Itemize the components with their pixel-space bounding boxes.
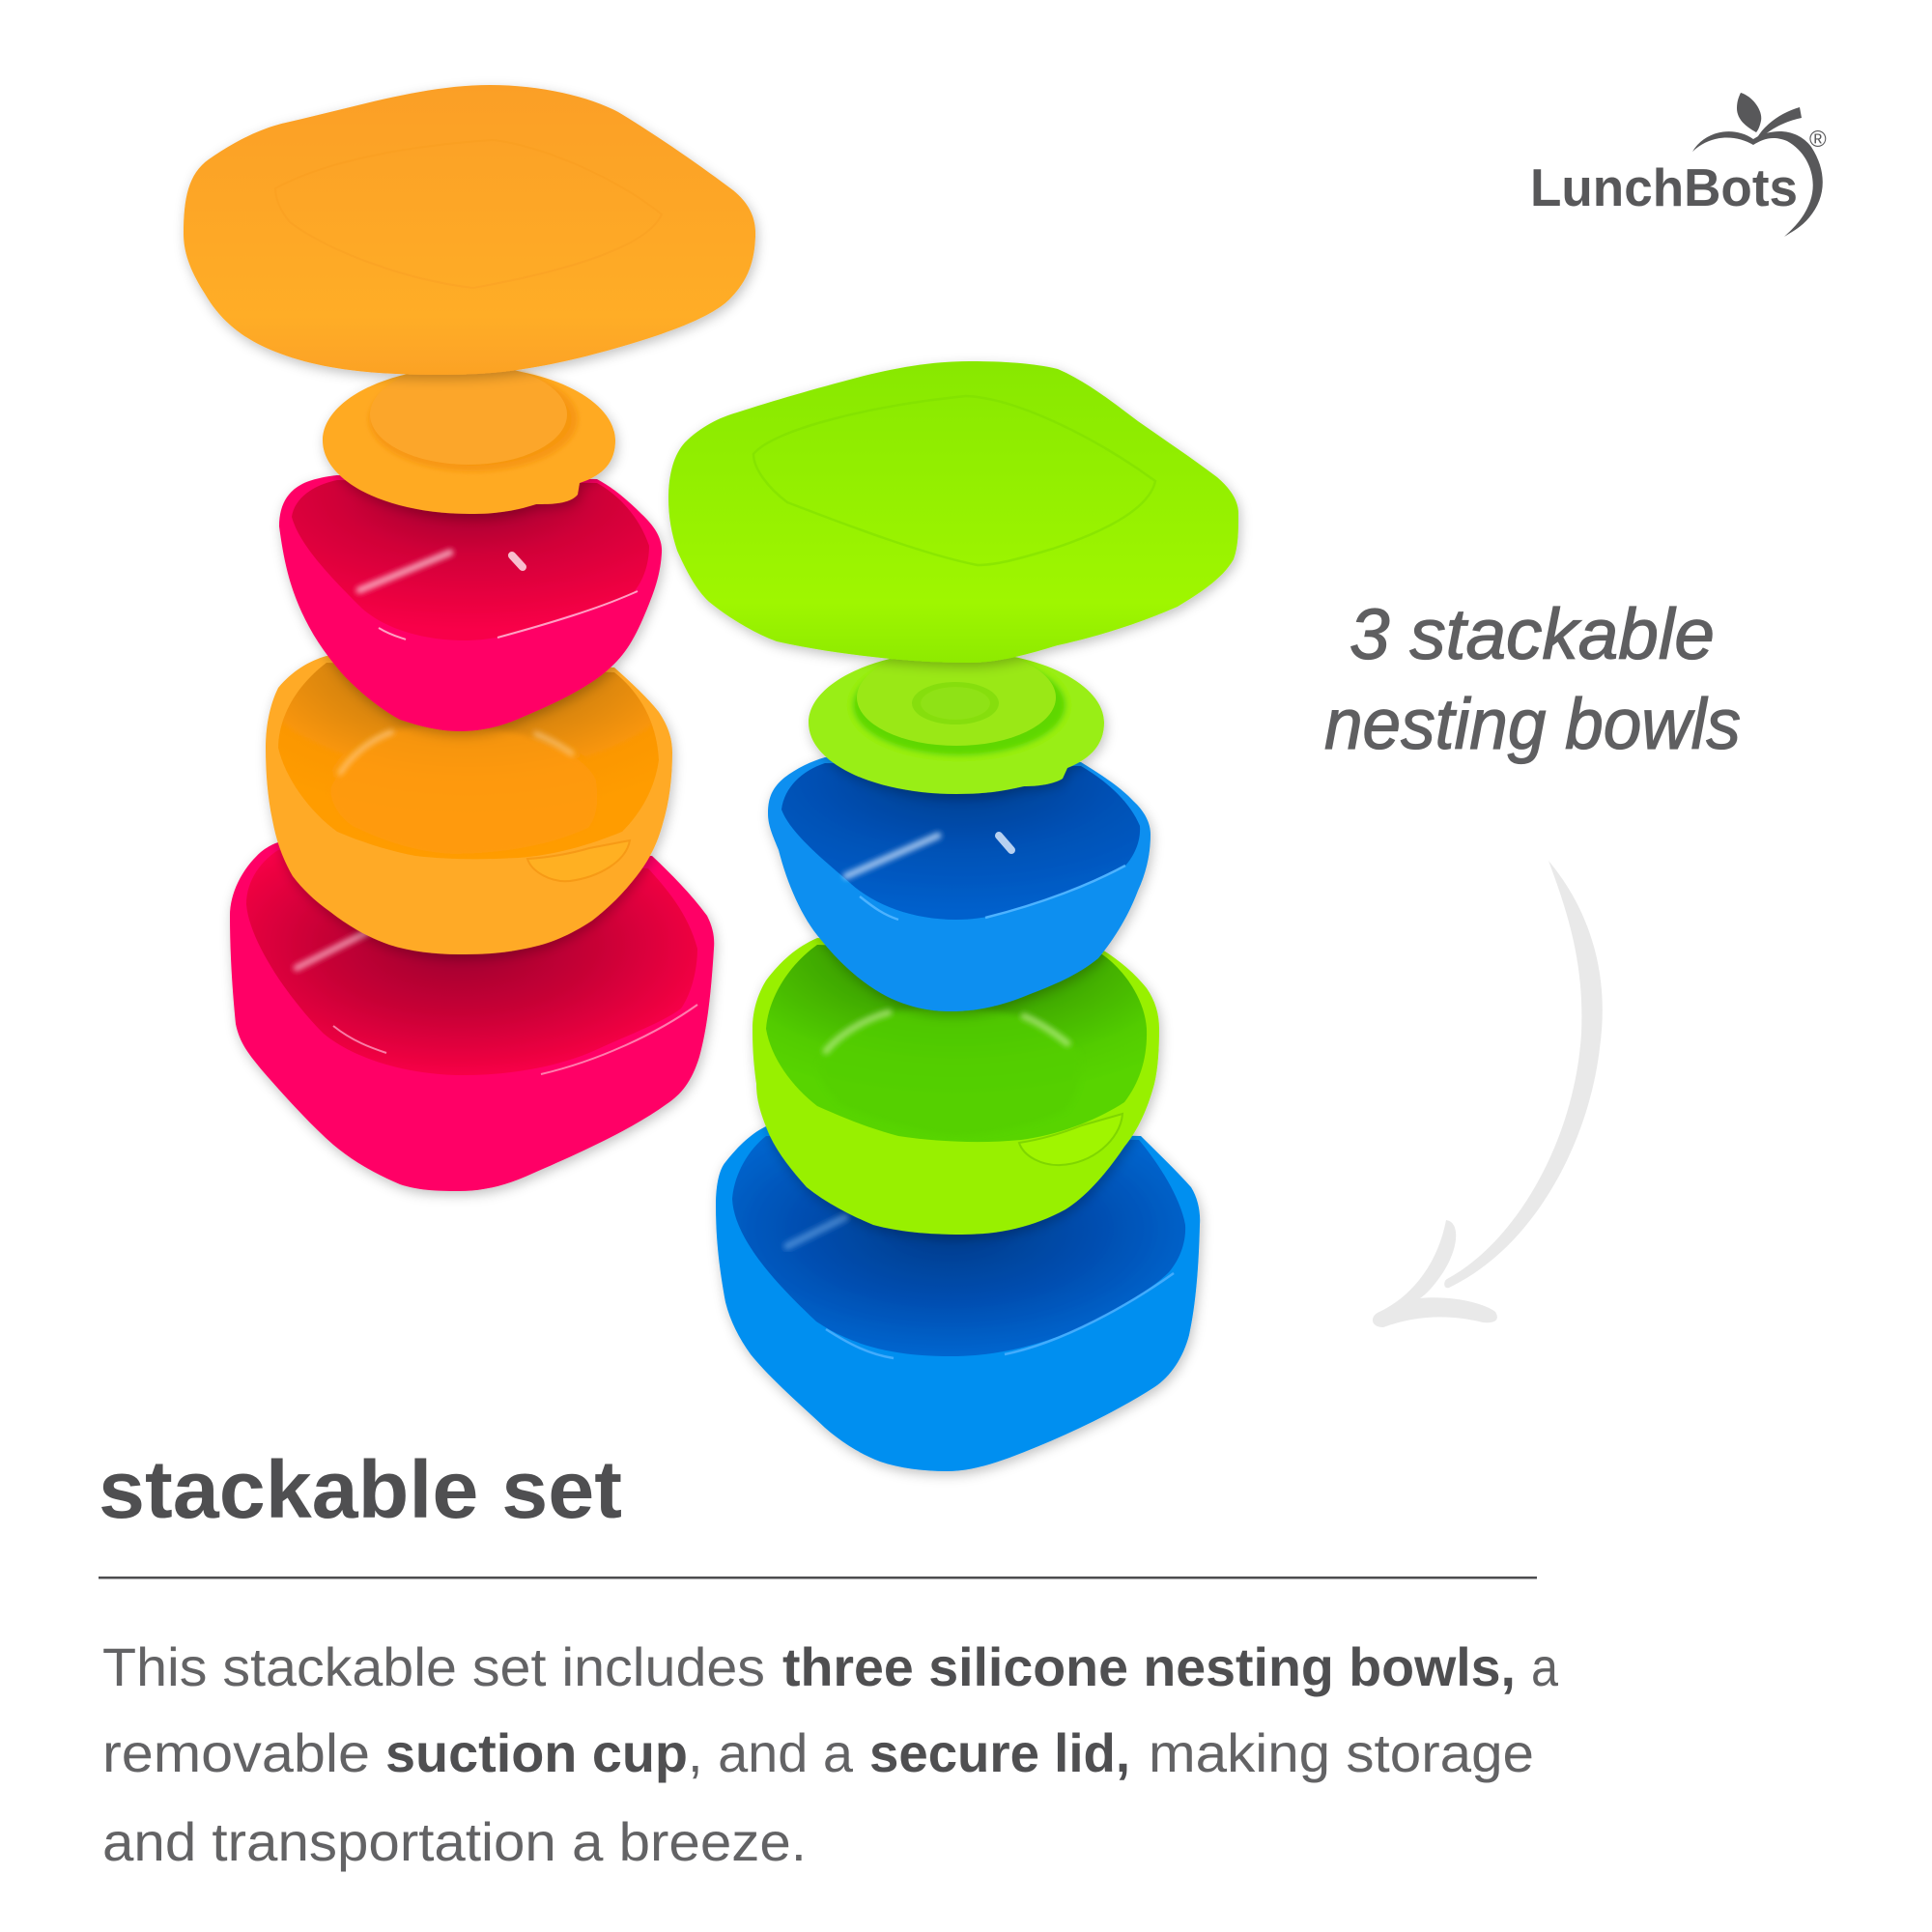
body text: a bbox=[1531, 1636, 1559, 1697]
divider bbox=[99, 1577, 1537, 1578]
body text: , and a bbox=[688, 1722, 854, 1783]
large pink bowl bbox=[230, 842, 714, 1191]
small pink bowl bbox=[279, 475, 662, 731]
handwritten callout: 3 stackable bbox=[1350, 594, 1715, 674]
product stack: pink and orange bbox=[184, 85, 755, 1191]
small blue bowl bbox=[768, 757, 1151, 1011]
green lid bbox=[668, 361, 1238, 663]
handwritten callout bbox=[1324, 594, 1741, 764]
bowl tab bbox=[527, 840, 630, 881]
large blue bowl bbox=[716, 1126, 1200, 1471]
body text: and transportation a breeze. bbox=[102, 1811, 807, 1872]
green bowl bbox=[753, 938, 1159, 1235]
orange bowl bbox=[266, 656, 672, 954]
logo wordmark: LunchBots bbox=[1530, 157, 1798, 217]
body text: three silicone nesting bowls, bbox=[782, 1636, 1516, 1697]
body text: secure lid, bbox=[869, 1722, 1130, 1783]
bowl floor bbox=[817, 1008, 1080, 1136]
body text bbox=[102, 1636, 1559, 1872]
arrow bbox=[1373, 861, 1603, 1327]
LunchBots logo bbox=[1530, 93, 1827, 237]
orange suction cup bbox=[323, 364, 615, 514]
bowl floor bbox=[330, 724, 597, 854]
orange lid bbox=[184, 85, 755, 375]
title: stackable set bbox=[99, 1444, 622, 1535]
handwritten callout: nesting bowls bbox=[1324, 684, 1741, 764]
body text: This stackable set includes bbox=[102, 1636, 765, 1697]
bowl tab bbox=[1019, 1114, 1122, 1165]
body text: removable bbox=[102, 1722, 370, 1783]
green suction cup bbox=[809, 649, 1104, 794]
product stack: blue and green bbox=[668, 361, 1238, 1471]
body text: suction cup bbox=[385, 1722, 688, 1783]
body text: making storage bbox=[1149, 1722, 1534, 1783]
logo apple mark bbox=[1692, 93, 1823, 237]
registered mark: ® bbox=[1809, 127, 1827, 153]
